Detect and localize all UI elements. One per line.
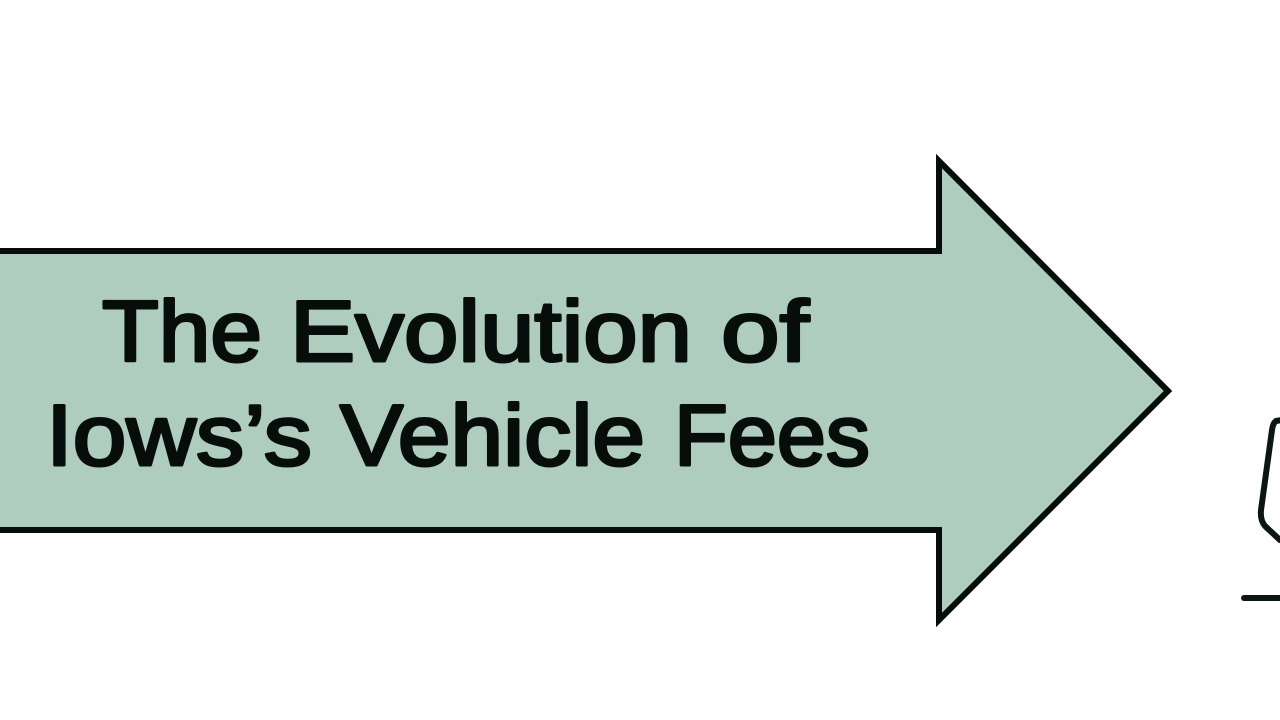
- title: Evolution: [290, 284, 692, 380]
- title: of: [721, 284, 810, 380]
- title: Iows’s: [46, 388, 312, 484]
- title: [46, 284, 870, 484]
- title: Vehicle: [340, 388, 645, 484]
- arrow banner: [0, 161, 1168, 620]
- title: Fees: [674, 388, 870, 484]
- icon: partial outline at right edge: [1244, 420, 1280, 598]
- title: The: [102, 284, 262, 380]
